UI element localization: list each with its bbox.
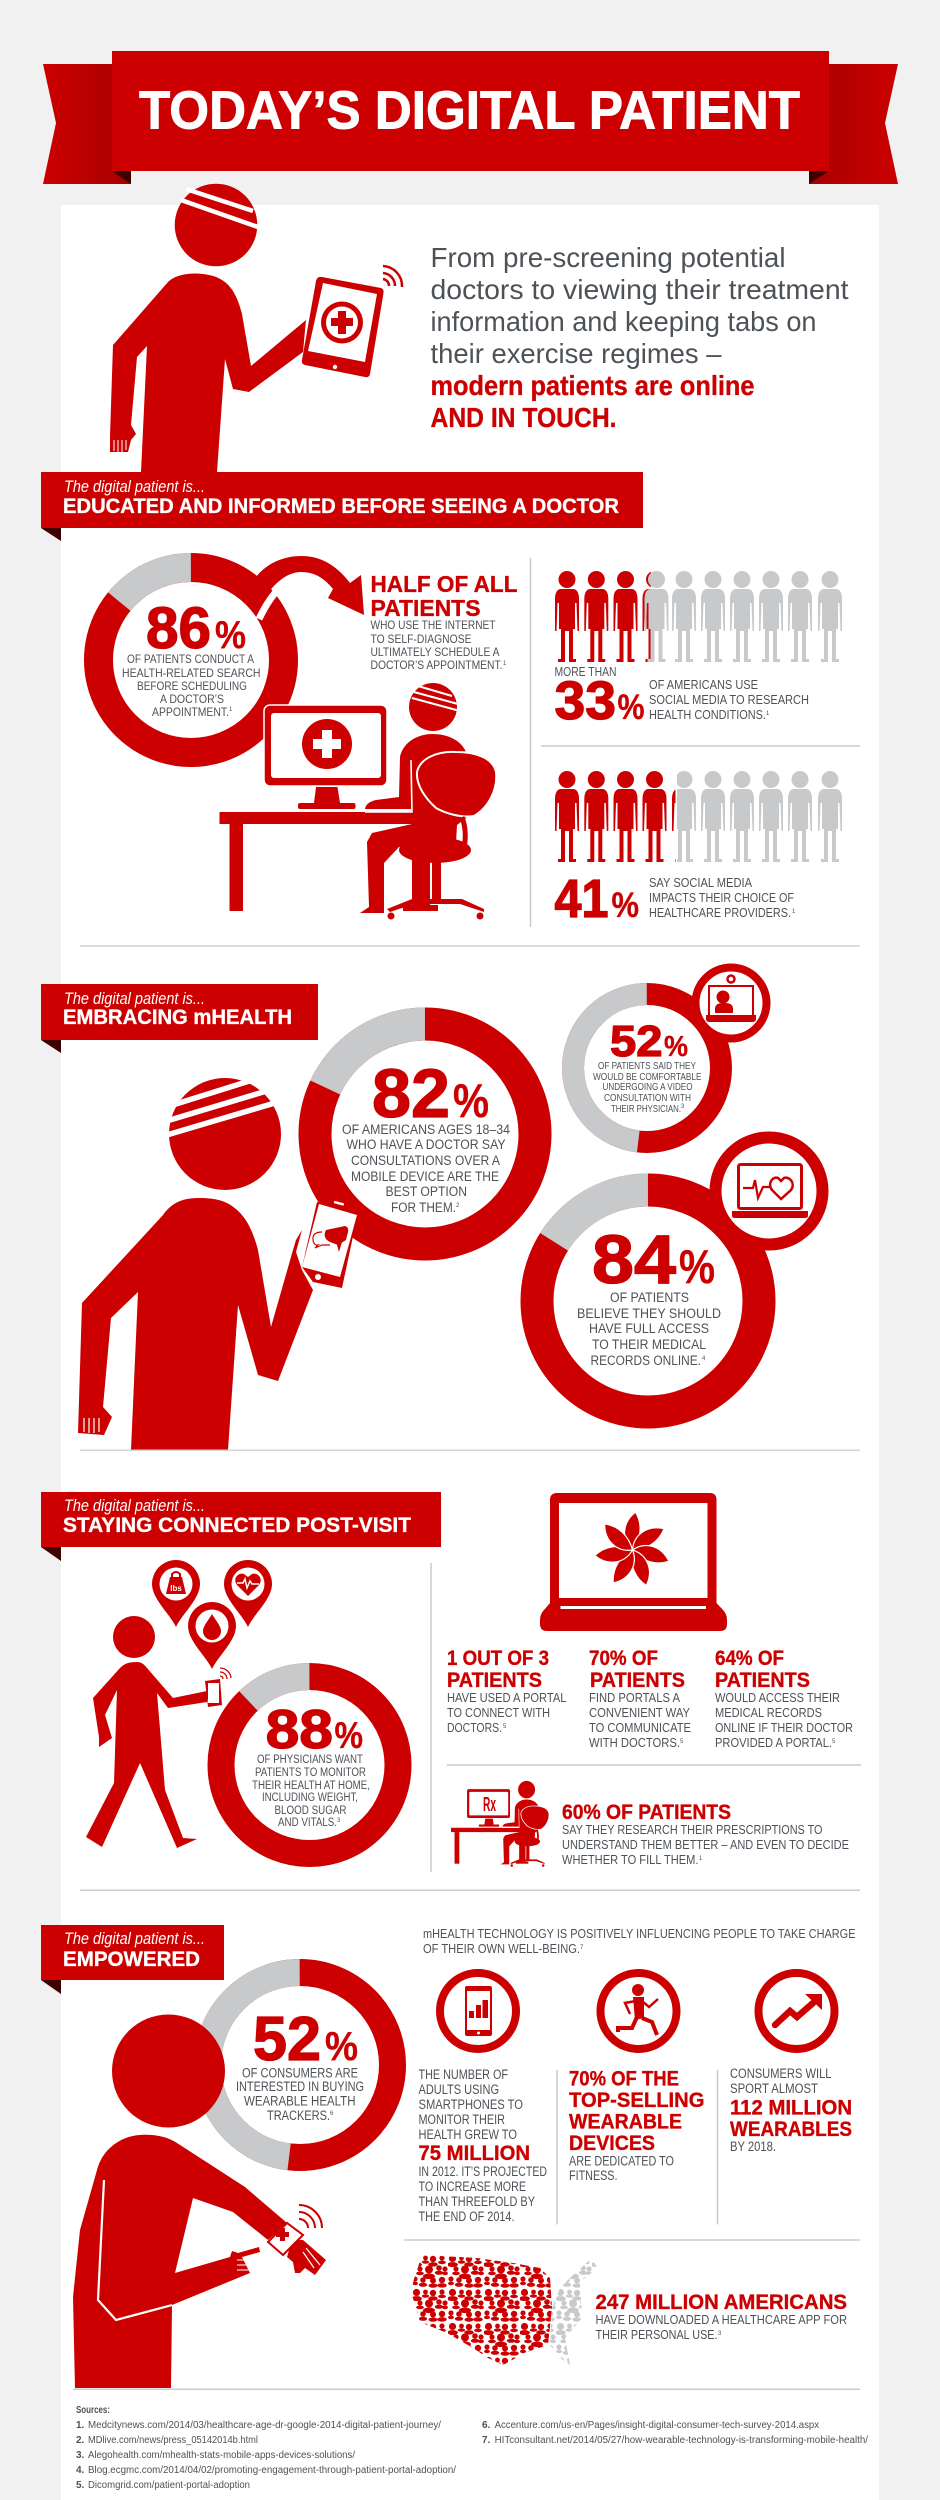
stat column: 70% of patients: PATIENTS [590,1669,685,1692]
text: half of all patients: TO SELF-DIAGNOSE [370,632,472,646]
icon: tablet [302,266,402,377]
text column: 75 million: ADULTS USING [418,2082,499,2097]
donut chart: 84% medical records: 84 [592,1221,676,1298]
stat: 41% [554,869,796,929]
patient with tablet illustration [110,184,402,472]
walking patient illustration [86,1616,231,1848]
section banner: embracing mHealth [41,984,318,1053]
stat: 33% [554,665,809,731]
stat: 41%: % [612,886,639,925]
text column: 75 million: THE END OF 2014. [418,2209,514,2224]
intro text: mHealth technology [423,1927,856,1956]
text column: 75 million [418,2067,547,2224]
stat column: 1 out of 3 patients: DOCTORS. [447,1721,502,1735]
sources: Medcitynews.com/2014/03/healthcare-age-dr-google-2014-digital-patient-journey/ [88,2420,441,2431]
stat column: 64% of patients: MEDICAL RECORDS [715,1706,822,1720]
stat: 247 million americans: HAVE DOWNLOADED A HEALTHCARE APP FOR [596,2313,847,2327]
text column: 75 million: SMARTPHONES TO [418,2097,523,2112]
patient with smartphone illustration [78,1073,358,1450]
donut chart: 88% [184,1640,435,1890]
text column: 70% of top-selling wearables: DEVICES [569,2132,655,2155]
donut chart: 82%: % [453,1074,489,1127]
stat: 33%: 1 [766,711,770,717]
section banner: empowered: The digital patient is... [64,1929,205,1948]
divider lines [530,558,860,927]
stat: 60% of patients: UNDERSTAND THEM BETTER – AND EVEN TO DECIDE [562,1838,849,1852]
text column: 112 million wearables: 112 MILLION [730,2097,852,2120]
intro text: modern patients are online [430,370,754,401]
donut chart: 88%: BLOOD SUGAR [274,1805,346,1817]
stat: 41%: HEALTHCARE PROVIDERS. [649,906,791,920]
text: half of all patients: PATIENTS [370,595,480,621]
section banner: empowered: EMPOWERED [63,1948,200,1971]
stat: 33%: MORE THAN [554,665,616,679]
donut chart: 82%: FOR THEM. [391,1200,456,1215]
pictogram: 41% of people [555,771,842,862]
stat: 33%: SOCIAL MEDIA TO RESEARCH [649,693,809,707]
text column: 75 million: 75 MILLION [418,2142,530,2165]
stat column: 70% of patients: CONVENIENT WAY [589,1706,691,1720]
icon: runner [600,1973,676,2049]
text column: 112 million wearables: WEARABLES [730,2118,852,2141]
donut chart: 52% video consultation: % [664,1031,688,1063]
arrow: curve to half of all patients [256,556,364,619]
section banner: embracing mHealth: EMBRACING mHEALTH [63,1006,292,1029]
stat column: 70% of patients [589,1647,691,1750]
stat: 247 million americans: 3 [718,2331,722,2337]
stat column: 64% of patients: PATIENTS [715,1669,810,1692]
text column: 75 million: TO INCREASE MORE [418,2179,526,2194]
stat: 247 million americans [596,2291,847,2342]
text column: 70% of top-selling wearables: FITNESS. [569,2168,618,2183]
donut chart: 52% wearable trackers: INTERESTED IN BUYING [236,2079,364,2094]
intro text: mHealth technology: 7 [580,1945,584,1951]
icon: phone with signal [205,1668,231,1707]
donut chart: 86%: BEFORE SCHEDULING [137,679,247,693]
patient researching prescriptions illustration [451,1781,549,1867]
stat: 247 million americans: THEIR PERSONAL USE. [596,2328,718,2342]
text column: 75 million: IN 2012. IT’S PROJECTED [418,2164,547,2179]
sources: 6. [482,2420,491,2431]
donut chart: 52% wearable trackers [197,1962,403,2168]
donut chart: 88%: 88 [266,1698,333,1760]
icon: weight pin [152,1560,200,1627]
donut chart: 84% medical records: TO THEIR MEDICAL [592,1337,706,1352]
stat column: 70% of patients: 5 [680,1739,684,1745]
stat column: 64% of patients: 5 [832,1739,836,1745]
sources: 5. [76,2480,85,2491]
stat column: 1 out of 3 patients: 1 OUT OF 3 [447,1647,549,1670]
donut chart: 88%: INCLUDING WEIGHT, [262,1792,358,1804]
donut chart: 86%: A DOCTOR’S [160,692,224,706]
donut chart: 86%: HEALTH-RELATED SEARCH [122,666,260,680]
donut chart: 84% medical records: BELIEVE THEY SHOULD [577,1306,721,1321]
text column: 70% of top-selling wearables [569,2068,704,2183]
sources: 7. [482,2435,491,2446]
text column: 70% of top-selling wearables: TOP-SELLING [569,2089,704,2112]
donut chart: 82%: 82 [372,1055,450,1132]
intro text: From pre-screening potential [430,242,786,273]
stat: 60% of patients: WHETHER TO FILL THEM. [562,1853,698,1867]
donut chart: 88%: 3 [337,1818,341,1824]
donut chart: 88%: % [334,1715,363,1756]
donut chart: 52% wearable trackers: 6 [330,2111,334,2117]
sources: Blog.ecgmc.com/2014/04/02/promoting-engagement-through-patient-portal-adoption/ [88,2465,456,2476]
stat column: 64% of patients: WOULD ACCESS THEIR [715,1691,840,1705]
donut chart: 52% video consultation: WOULD BE COMFORTABLE [593,1071,702,1083]
text: half of all patients: HALF OF ALL [370,571,518,597]
stat column: 1 out of 3 patients: 5 [503,1724,507,1730]
white content panel [61,205,879,2500]
donut chart: 52% wearable trackers: WEARABLE HEALTH [244,2094,356,2108]
donut chart: 82%: BEST OPTION [386,1184,467,1199]
donut chart: 84% medical records: OF PATIENTS [610,1290,689,1305]
donut chart: 88%: AND VITALS. [278,1817,337,1829]
donut chart: 52% video consultation [564,985,730,1151]
donut chart: 84% medical records: % [679,1240,715,1293]
sources: Alegohealth.com/mhealth-stats-mobile-apps-devices-solutions/ [88,2450,355,2461]
text column: 112 million wearables: CONSUMERS WILL [730,2066,832,2081]
stat: 60% of patients: 1 [699,1856,703,1862]
icon: video consultation badge [696,968,766,1038]
text column: 75 million: THAN THREEFOLD BY [418,2194,535,2209]
stat column: 70% of patients: TO COMMUNICATE [589,1721,691,1735]
stat column: 1 out of 3 patients: TO CONNECT WITH [447,1706,550,1720]
text column: 112 million wearables: BY 2018. [730,2139,776,2154]
stat column: 70% of patients: WITH DOCTORS. [589,1736,680,1750]
donut chart: 52% video consultation: 52 [610,1017,662,1066]
icon: laptop with heartbeat badge [716,1138,822,1244]
intro text: information and keeping tabs on [430,306,816,337]
section banner: embracing mHealth: The digital patient is... [64,989,205,1008]
stat: 33%: OF AMERICANS USE [649,678,758,692]
map: US made of people icons [412,2255,597,2365]
stat column: 64% of patients: PROVIDED A PORTAL. [715,1736,832,1750]
stat: 60% of patients: 60% OF PATIENTS [562,1801,731,1824]
donut chart: 82%: WHO HAVE A DOCTOR SAY [346,1137,506,1152]
icon: upward trend arrow [758,1973,834,2049]
donut chart: 52% video consultation: CONSULTATION WITH [604,1092,691,1104]
sources: 2. [76,2435,85,2446]
patient at computer illustration [220,683,496,920]
intro text: mHealth technology: OF THEIR OWN WELL-BEING. [423,1942,580,1956]
icon: weight pin: lbs [170,1584,182,1593]
intro text: mHealth technology: mHEALTH TECHNOLOGY IS POSITIVELY INFLUENCING PEOPLE TO TAKE CHARGE [423,1927,856,1941]
donut chart: 52% video consultation: 3 [681,1104,685,1110]
icon: heart rate pin [224,1560,272,1627]
donut chart: 86%: % [215,614,246,657]
stat column: 64% of patients: 64% OF [715,1647,784,1670]
stat: 33%: HEALTH CONDITIONS. [649,708,766,722]
donut chart: 86%: APPOINTMENT. [152,705,229,719]
intro text [430,242,849,433]
donut chart: 86% [61,530,321,790]
stat: 33%: 33 [554,671,616,731]
donut chart: 52% wearable trackers: % [325,2023,358,2069]
sources: 3. [76,2450,85,2461]
section banner: educated and informed: EDUCATED AND INFORMED BEFORE SEEING A DOCTOR [63,495,619,518]
title ribbon [43,51,898,184]
section banner: educated and informed [41,472,643,541]
sources: MDlive.com/news/press_05142014b.html [88,2435,258,2446]
text: half of all patients: 1 [503,661,507,667]
donut chart: 86%: OF PATIENTS CONDUCT A [127,652,254,666]
stat column: 64% of patients: ONLINE IF THEIR DOCTOR [715,1721,853,1735]
sources: 1. [76,2420,85,2431]
sources: HITconsultant.net/2014/05/27/how-wearable-technology-is-transforming-mobile-health/ [495,2435,868,2446]
stat column: 1 out of 3 patients: PATIENTS [447,1669,542,1692]
pictogram: 33% of people [555,571,842,662]
donut chart: 86%: 86 [146,596,211,661]
intro text: doctors to viewing their treatment [430,274,849,305]
text column: 75 million: THE NUMBER OF [418,2067,508,2082]
section banner: educated and informed: The digital patient is... [64,477,205,496]
donut chart: 82% [279,988,571,1280]
icon: laptop with patient portal logo [540,1493,727,1631]
donut chart: 82%: MOBILE DEVICE ARE THE [351,1169,499,1184]
text column: 112 million wearables: SPORT ALMOST [730,2081,818,2096]
section banner: staying connected post-visit [41,1492,441,1561]
donut chart: 52% wearable trackers: OF CONSUMERS ARE [242,2066,358,2080]
section banner: empowered [41,1925,224,1994]
sources [76,2405,868,2491]
stat: 247 million americans: 247 MILLION AMERICANS [596,2291,847,2314]
donut chart: 88%: THEIR HEALTH AT HOME, [252,1780,370,1792]
section banner: staying connected post-visit: The digital patient is... [64,1496,205,1515]
icon: blood drop pin [188,1602,236,1669]
text column: 70% of top-selling wearables: WEARABLE [569,2110,682,2134]
sources: 4. [76,2465,85,2476]
patient researching prescriptions illustration: Rx [483,1794,496,1816]
stat: 33%: % [618,688,644,727]
donut chart: 84% medical records: HAVE FULL ACCESS [589,1321,709,1336]
icon: smartphone [302,1201,358,1288]
intro text: AND IN TOUCH. [430,402,616,433]
donut chart: 88%: PATIENTS TO MONITOR [255,1767,366,1779]
text: half of all patients: DOCTOR’S APPOINTMENT. [370,658,502,672]
donut chart: 52% video consultation: THEIR PHYSICIAN. [611,1103,681,1115]
sources: Sources: [76,2405,110,2416]
text: half of all patients [370,571,518,672]
stat: 60% of patients: SAY THEY RESEARCH THEIR PRESCRIPTIONS TO [562,1823,823,1837]
donut chart: 52% video consultation: OF PATIENTS SAID THEY [598,1060,696,1072]
stat: 60% of patients [562,1801,849,1867]
donut chart: 84% medical records: 4 [702,1356,706,1362]
donut chart: 82%: CONSULTATIONS OVER A [351,1153,500,1168]
section banner: staying connected post-visit: STAYING CONNECTED POST-VISIT [63,1514,411,1537]
stat column: 64% of patients [715,1647,853,1750]
icon: smartphone with bar chart [440,1973,516,2049]
donut chart: 52% wearable trackers: TRACKERS. [267,2108,330,2123]
text column: 70% of top-selling wearables: 70% OF THE [569,2068,679,2091]
stat column: 70% of patients: FIND PORTALS A [589,1691,681,1705]
title: TODAY’S DIGITAL PATIENT [139,80,800,140]
donut chart: 84% medical records: RECORDS ONLINE. [590,1353,701,1368]
donut chart: 52% wearable trackers: 52 [253,2005,321,2074]
stat column: 1 out of 3 patients: HAVE USED A PORTAL [447,1691,567,1705]
stat: 41%: 1 [792,909,796,915]
intro text: their exercise regimes – [430,338,722,369]
donut chart: 82%: 2 [456,1203,460,1209]
text: half of all patients: ULTIMATELY SCHEDULE A [370,645,500,659]
donut chart: 82%: OF AMERICANS AGES 18–34 [342,1122,510,1137]
donut chart: 86%: 1 [229,707,233,713]
donut chart: 84% medical records [495,1148,801,1454]
sources: Dicomgrid.com/patient-portal-adoption [88,2480,250,2491]
stat: 41%: SAY SOCIAL MEDIA [649,876,753,890]
text column: 75 million: MONITOR THEIR [418,2112,505,2127]
donut chart: 88%: OF PHYSICIANS WANT [257,1754,363,1766]
stat: 41%: IMPACTS THEIR CHOICE OF [649,891,794,905]
stat column: 70% of patients: 70% OF [589,1647,658,1670]
text column: 112 million wearables [730,2066,852,2154]
stat: 41%: 41 [554,869,608,929]
sources: Accenture.com/us-en/Pages/insight-digital-consumer-tech-survey-2014.aspx [495,2420,819,2431]
text: half of all patients: WHO USE THE INTERNET [370,618,496,632]
patient checking wearable illustration [73,2014,326,2388]
text column: 75 million: HEALTH GREW TO [418,2127,517,2142]
donut chart: 52% video consultation: UNDERGOING A VIDEO [602,1081,692,1093]
icon: pinwheel logo [594,1512,671,1588]
text column: 70% of top-selling wearables: ARE DEDICATED TO [569,2154,674,2169]
icon: wrist wearable [268,2205,326,2275]
stat column: 1 out of 3 patients [447,1647,567,1735]
